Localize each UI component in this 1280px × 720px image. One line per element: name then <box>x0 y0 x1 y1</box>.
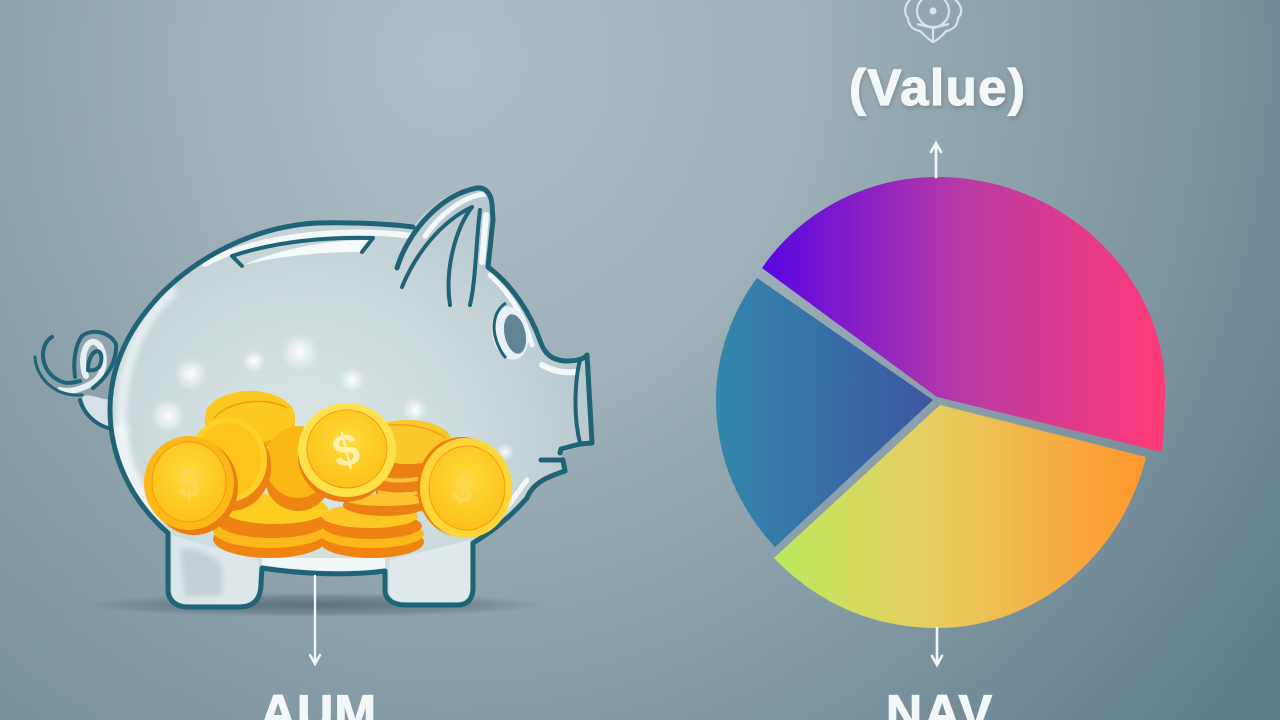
coin stack bottom left <box>213 494 328 558</box>
coin right <box>417 437 512 538</box>
center back coin <box>265 426 331 511</box>
pie slice: yellow-orange <box>774 405 1146 628</box>
coin right: $ <box>448 467 478 513</box>
arrow: pie to value <box>931 143 941 177</box>
slot highlight <box>243 240 372 265</box>
coin stack back right <box>364 420 452 510</box>
sparkles <box>150 333 514 461</box>
arrow: pig to AUM <box>310 576 320 664</box>
coin center with dollar: $ <box>327 422 365 478</box>
icon: value badge <box>905 0 961 42</box>
ground shadow under pig <box>83 593 547 617</box>
pig outline <box>110 188 592 607</box>
coin stack bottom right <box>320 494 427 558</box>
pie chart <box>716 177 1165 628</box>
pie slice: purple-pink <box>762 177 1165 452</box>
arrow: pie to NAV <box>932 628 942 665</box>
coin front left <box>144 436 238 535</box>
leg and belly highlights <box>172 535 470 604</box>
pie slice: blue <box>716 278 933 547</box>
glass highlights <box>120 194 577 530</box>
pig body glass <box>110 188 592 607</box>
pig tail <box>35 332 116 428</box>
pile of gold coins <box>144 391 512 558</box>
piggy bank <box>35 188 592 607</box>
coin 2 <box>187 418 277 516</box>
coin front left: $ <box>178 462 200 506</box>
pig eye <box>487 303 533 363</box>
back coin top-left <box>205 391 295 449</box>
label: Value: (Value) <box>849 59 1025 116</box>
coin center with dollar <box>298 403 396 502</box>
